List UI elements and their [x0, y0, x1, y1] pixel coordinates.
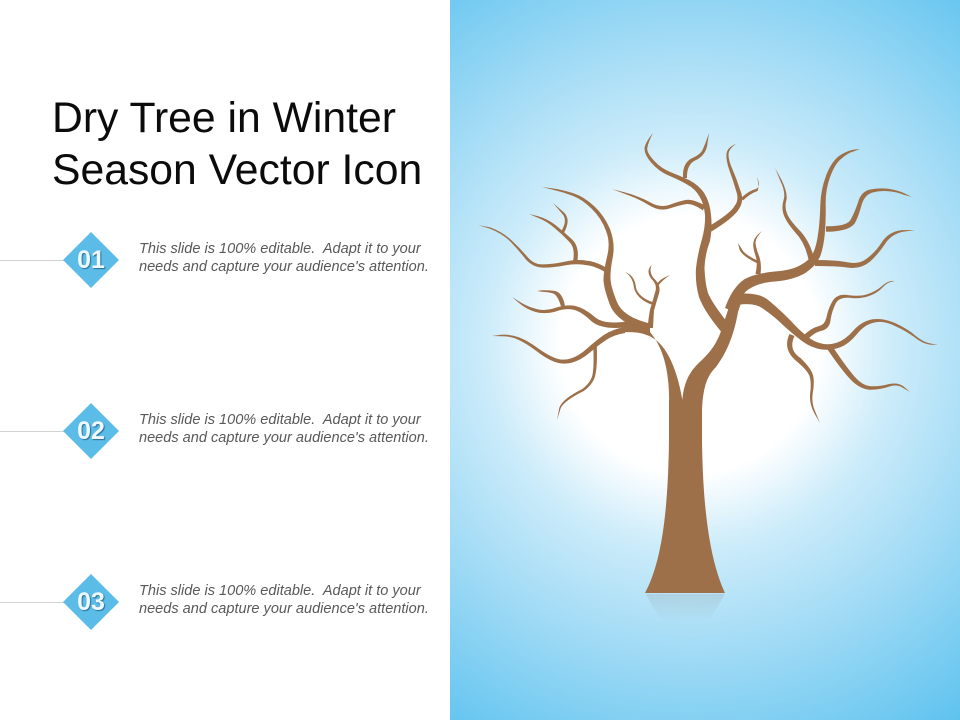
branch: right upper main: [725, 149, 860, 312]
branch: right wavy: [803, 281, 895, 340]
branch: right top outer: [826, 188, 912, 232]
trunk: [645, 400, 725, 593]
title: Dry Tree in Winter: [52, 94, 396, 142]
branch: upper center left: [612, 189, 705, 210]
number 03: 03: [77, 588, 105, 616]
text block 03: This slide is 100% editable. Adapt it to your: [139, 583, 421, 599]
branch: upper left: [542, 187, 650, 332]
twig: lower left hanging: [557, 346, 597, 420]
twig: far left long: [529, 214, 578, 262]
branch: right lower main: [733, 293, 938, 350]
right limb: [682, 292, 742, 410]
text block 01: This slide is 100% editable. Adapt it to your: [139, 241, 421, 257]
twig: inner left stem: [648, 265, 660, 328]
twig: upper center right: [741, 177, 759, 200]
branch: right hanging: [787, 334, 820, 423]
text block 01: needs and capture your audience's attention.: [139, 259, 429, 275]
twig: center right stem: [753, 231, 762, 274]
branch: far left: [478, 225, 609, 275]
left limb: [618, 322, 683, 410]
number 02: 02: [77, 417, 105, 445]
number 01: 01: [77, 246, 105, 274]
trunk reflection: [646, 594, 725, 622]
diamond badge 02: [63, 403, 119, 459]
branch: upper center right: [708, 144, 742, 232]
panel: blue radial background: [450, 0, 960, 720]
text block 03: needs and capture your audience's attention.: [139, 601, 429, 617]
branch: middle left: [512, 297, 630, 328]
text block 02: needs and capture your audience's attention.: [139, 430, 429, 446]
illustration: dry tree: [478, 133, 938, 611]
diamond badge 03: [63, 574, 119, 630]
twig: top center: [683, 133, 709, 178]
twig: middle left: [537, 290, 565, 306]
twig: inner left left fork: [625, 272, 652, 304]
list item 01: [0, 232, 429, 288]
text block 01: [139, 241, 429, 275]
tree branches: [478, 133, 938, 593]
title: [52, 94, 422, 194]
twig: inner left right fork: [656, 275, 670, 286]
text block 02: [139, 412, 429, 446]
list item 03: [0, 574, 429, 630]
diamond badge 01: [63, 232, 119, 288]
branch: lower left: [492, 327, 625, 364]
twig: far left short: [553, 203, 568, 234]
twig: center right fork: [738, 243, 758, 264]
title: Season Vector Icon: [52, 146, 422, 194]
text block 02: This slide is 100% editable. Adapt it to your: [139, 412, 421, 428]
text block 03: [139, 583, 429, 617]
branch: right top inner: [775, 168, 815, 262]
branch: right middle: [815, 230, 915, 268]
branch: center main: [645, 133, 729, 332]
list item 02: [0, 403, 429, 459]
branch: right lowest: [828, 346, 910, 392]
